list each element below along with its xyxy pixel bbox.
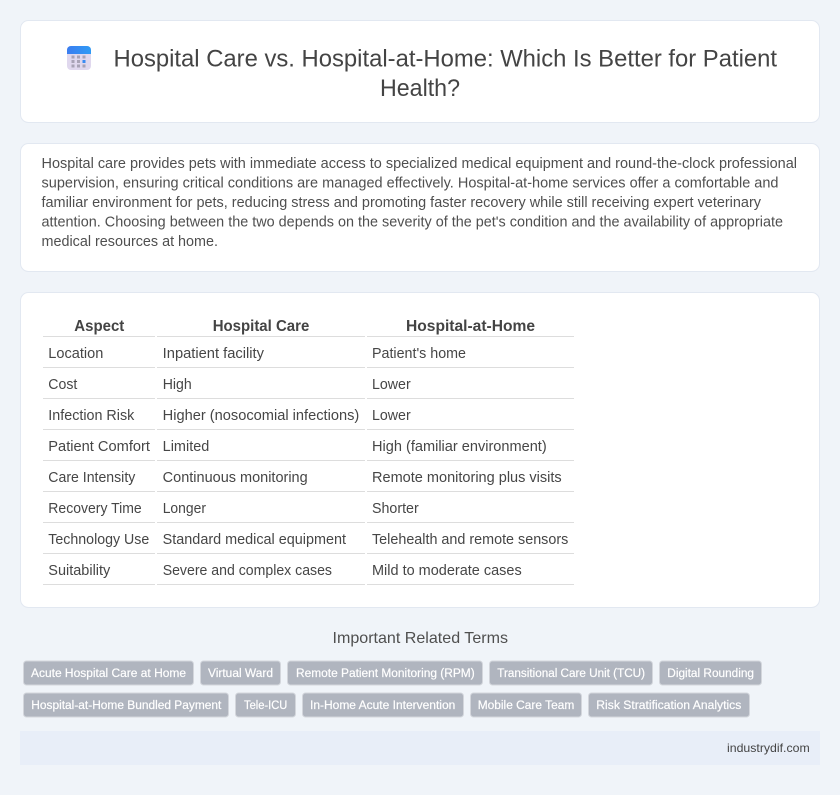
- tag: mobile care team: [470, 693, 582, 717]
- title: Hospital Care vs. Hospital-at-Home: Which Is Better for Patient: [114, 46, 777, 72]
- table row: care intensity: Care Intensity: [48, 470, 136, 486]
- tag: hospital-at-home bundled payment: [24, 693, 228, 717]
- text block: summary: supervision, ensuring critical conditions are managed effectively. Hospital-at-home services offer a comfortable and: [42, 176, 779, 192]
- panel: comparison table: [20, 292, 820, 608]
- table row: suitability: Severe and complex cases: [163, 563, 332, 579]
- table row: patient comfort: High (familiar environment): [372, 439, 547, 455]
- tag: tele-icu: Tele-ICU: [244, 698, 287, 712]
- table row: recovery time: [48, 501, 419, 517]
- table row: location: [48, 346, 466, 362]
- table row: care intensity: [48, 470, 562, 486]
- footer: industrydif.com: [727, 741, 810, 755]
- table row: infection risk: [48, 408, 411, 424]
- table row: recovery time: Longer: [163, 501, 206, 517]
- tag: virtual ward: Virtual Ward: [208, 666, 273, 680]
- tag: transitional care unit: Transitional Care Unit (TCU): [497, 666, 645, 680]
- tag: risk stratification analytics: Risk Stratification Analytics: [596, 698, 741, 712]
- title: Health?: [380, 75, 460, 102]
- table row: patient comfort: [48, 439, 547, 455]
- heading: important related terms: Important Related Terms: [332, 630, 508, 647]
- table row: recovery time: Recovery Time: [48, 501, 142, 517]
- footer: [20, 731, 820, 765]
- table row: patient comfort: Limited: [163, 439, 209, 455]
- table header row: Hospital-at-Home: [406, 318, 535, 335]
- table row: cost: High: [163, 377, 192, 393]
- table row: infection risk: Higher (nosocomial infections): [163, 408, 359, 424]
- table row: suitability: Suitability: [48, 563, 111, 579]
- tag: remote patient monitoring: Remote Patient Monitoring (RPM): [296, 666, 475, 680]
- table row: technology use: Standard medical equipment: [163, 532, 346, 548]
- tag: transitional care unit: [490, 661, 652, 685]
- tag: in-home acute intervention: [302, 693, 464, 717]
- tag list: related terms: [24, 661, 762, 717]
- tag: digital rounding: [660, 661, 762, 685]
- table row: technology use: [48, 532, 568, 548]
- tag: acute hospital care at home: Acute Hospital Care at Home: [31, 666, 186, 680]
- text block: summary: Hospital care provides pets with immediate access to specialized medical equipment and round-the-clock professional: [42, 156, 797, 172]
- tag: virtual ward: [200, 661, 280, 685]
- table row: location: Inpatient facility: [163, 346, 265, 362]
- panel: intro paragraph: [20, 144, 820, 272]
- tag: remote patient monitoring: [288, 661, 482, 685]
- table row: suitability: Mild to moderate cases: [372, 563, 522, 579]
- table row: patient comfort: Patient Comfort: [48, 439, 150, 455]
- table row: suitability: [48, 563, 522, 579]
- tag: hospital-at-home bundled payment: Hospital-at-Home Bundled Payment: [31, 698, 222, 712]
- title: [114, 46, 777, 102]
- icon: calendar: [67, 46, 91, 70]
- text block: summary: attention. Choosing between the two depends on the severity of the pet's condition and the availability of appropriate: [42, 214, 783, 230]
- tag: risk stratification analytics: [588, 693, 750, 717]
- tag: tele-icu: [236, 693, 296, 717]
- table row: location: Patient's home: [372, 346, 466, 362]
- table row: recovery time: Shorter: [372, 501, 419, 517]
- table row: infection risk: Infection Risk: [48, 408, 135, 424]
- tag: mobile care team: Mobile Care Team: [478, 698, 574, 712]
- panel: title header: [20, 20, 820, 122]
- text block: summary: [42, 156, 797, 250]
- table row: care intensity: Continuous monitoring: [163, 470, 308, 486]
- table header row: Aspect: [74, 318, 125, 335]
- tag: acute hospital care at home: [24, 661, 194, 685]
- tag: digital rounding: Digital Rounding: [667, 666, 754, 680]
- table header row: Hospital Care: [213, 318, 309, 335]
- table row: infection risk: Lower: [372, 408, 411, 424]
- table row: technology use: Technology Use: [48, 532, 149, 548]
- table row: cost: Cost: [48, 377, 77, 393]
- text block: summary: medical resources at home.: [42, 234, 218, 250]
- tag: in-home acute intervention: In-Home Acute Intervention: [310, 698, 455, 712]
- table row: cost: [48, 377, 411, 393]
- table row: care intensity: Remote monitoring plus visits: [372, 470, 562, 486]
- table row: cost: Lower: [372, 377, 411, 393]
- table row: technology use: Telehealth and remote sensors: [372, 532, 568, 548]
- table row: location: Location: [48, 346, 103, 362]
- table header row: [74, 318, 535, 335]
- text block: summary: familiar environment for pets, reducing stress and promoting faster recovery while still receiving expert veterinary: [42, 195, 762, 211]
